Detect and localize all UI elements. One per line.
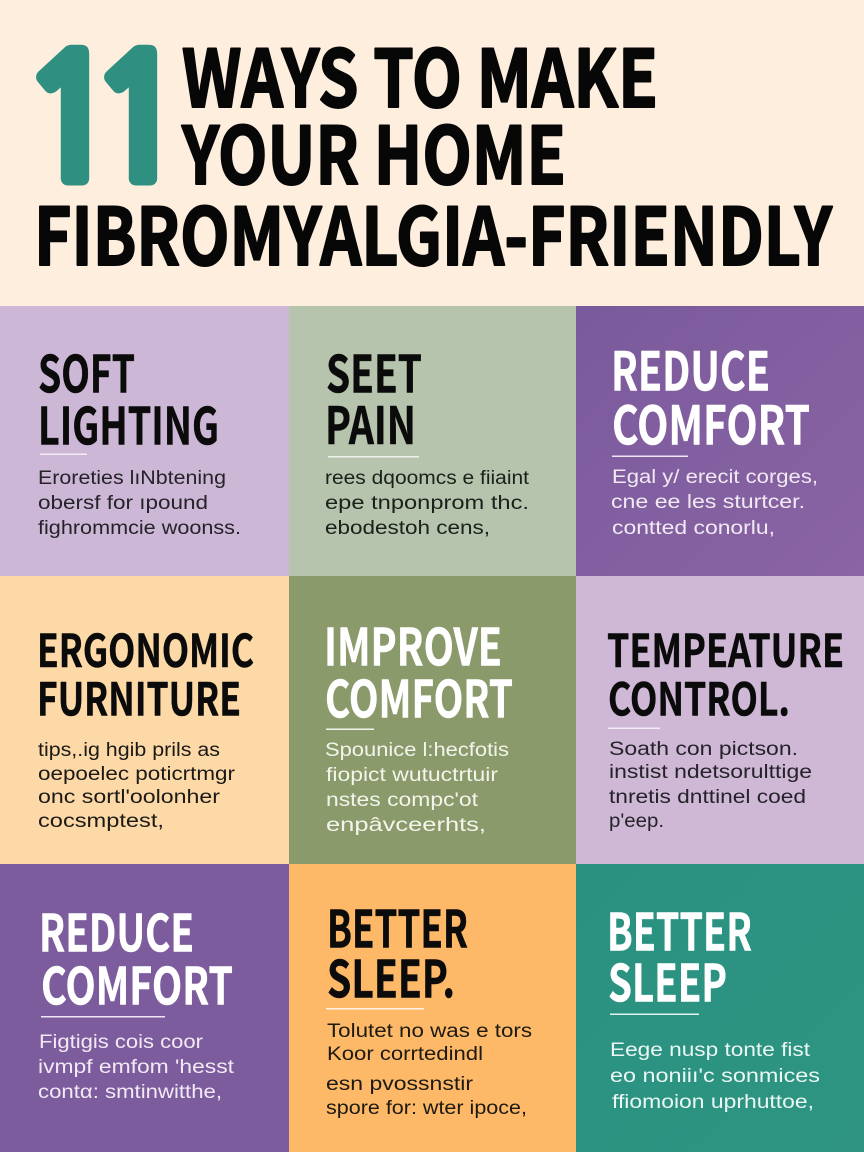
panel: better sleep orange: Tolutet no was e tors [327, 1021, 532, 1042]
panel: temperature control: CONTROL. [608, 664, 790, 728]
panel: ergonomic furniture: oepoelec poticrtmgr [38, 764, 236, 785]
panel: seet pain: epe tnponprom thc. [325, 493, 529, 514]
panel: seet pain [289, 306, 576, 576]
panel: soft lighting: fighrommcie woonss. [38, 518, 241, 539]
panel: better sleep orange: BETTER [327, 888, 468, 962]
panel: improve comfort: IMPROVE [324, 606, 502, 680]
panel: soft lighting: SOFT [38, 334, 135, 408]
title: YOUR HOME [181, 92, 566, 207]
panel: seet pain: SEET [326, 334, 422, 408]
panel: better sleep teal: BETTER [607, 892, 752, 966]
panel: reduce comfort lower: ivmpf emfom 'hesst [38, 1057, 235, 1078]
panel: reduce comfort: contted conorlu, [612, 518, 775, 539]
panel: ergonomic furniture: ERGONOMIC [37, 615, 254, 680]
panel: reduce comfort: cne ee les sturtcer. [611, 492, 805, 513]
panel: improve comfort: Spounice l:hecfotis [325, 740, 509, 761]
panel: better sleep orange: spore for: wter ipoce, [326, 1098, 527, 1119]
panel: reduce comfort lower [0, 864, 289, 1152]
panel: better sleep orange: SLEEP. [327, 938, 455, 1012]
panel: better sleep teal: eo noniiı'c sonmices [610, 1066, 820, 1087]
panel: improve comfort: nstes compc'ot [326, 790, 479, 811]
title: 11 [19, 35, 191, 206]
panel: temperature control: instist ndetsorulttige [609, 762, 812, 783]
panel: soft lighting [0, 306, 289, 576]
panel: reduce comfort: COMFORT [612, 384, 810, 460]
panel: reduce comfort lower: REDUCE [39, 892, 194, 966]
panel: improve comfort: COMFORT [325, 658, 513, 732]
panel: seet pain: PAIN [325, 385, 416, 459]
panel: reduce comfort: REDUCE [611, 330, 770, 406]
panel: better sleep teal: SLEEP [608, 942, 727, 1016]
panel: temperature control: Soath con pictson. [609, 739, 798, 760]
panel: better sleep teal: Eege nusp tonte fist [610, 1040, 811, 1061]
panel: seet pain: rees dqoomcs e fiiaint [325, 468, 530, 489]
panel: improve comfort: fiopict wutuctrtuir [326, 765, 499, 786]
panel: temperature control: p'eep. [609, 811, 664, 832]
panel: better sleep orange: Koor corrtedindl [327, 1044, 483, 1065]
panel: soft lighting: Eroreties lıNbtening [38, 468, 226, 489]
panel: better sleep orange: esn pvossnstir [326, 1074, 474, 1095]
panel: soft lighting: LIGHTING [38, 386, 219, 460]
panel: improve comfort: enpâvceerhts, [326, 815, 486, 836]
panel: temperature control: tnretis dnttinel coed [609, 787, 806, 808]
panel: ergonomic furniture: FURNITURE [37, 664, 241, 728]
panel: reduce comfort [576, 306, 864, 576]
panel: reduce comfort: Egal y/ erecit corges, [612, 467, 818, 488]
panel: better sleep orange [289, 864, 576, 1152]
panel: ergonomic furniture: onc sortl'oolonher [38, 787, 221, 808]
panel: reduce comfort lower: COMFORT [41, 946, 233, 1020]
panel: better sleep teal [576, 864, 864, 1152]
panel: reduce comfort lower: contα: smtinwitthe, [38, 1082, 222, 1103]
panel: soft lighting: obersf for ıpound [38, 493, 208, 514]
panel: improve comfort [289, 576, 576, 864]
panel: temperature control [576, 576, 864, 864]
panel: ergonomic furniture [0, 576, 289, 864]
panel: ergonomic furniture: cocsmptest, [38, 811, 164, 832]
panel: seet pain: ebodestoh cens, [325, 518, 490, 539]
title [19, 15, 833, 288]
panel: ergonomic furniture: tips,.ig hgib prils as [38, 740, 220, 761]
title: WAYS TO MAKE [182, 15, 658, 130]
panel: reduce comfort lower: Figtigis cois coor [39, 1032, 204, 1053]
panel: better sleep teal: ffiomoion uprhuttoe, [612, 1092, 814, 1113]
